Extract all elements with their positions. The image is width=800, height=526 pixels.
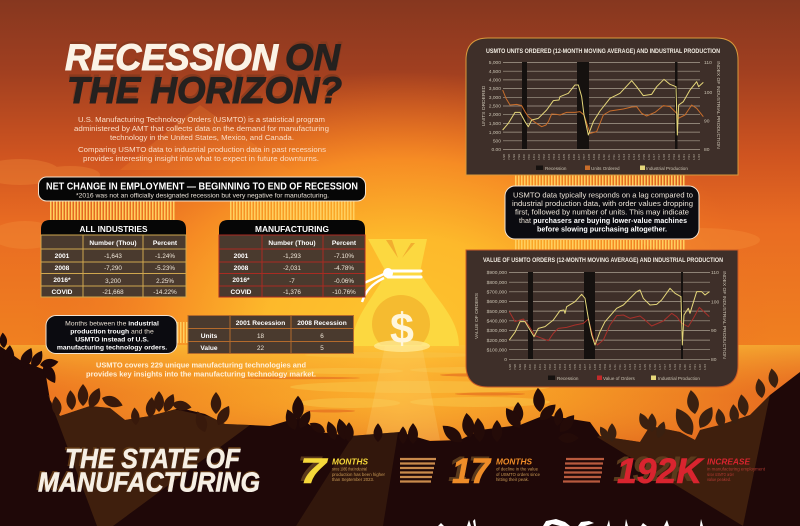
panel: manufacturing table: MANUFACTURING <box>255 225 329 234</box>
panel: units ordered chart: 1/07 <box>577 154 581 160</box>
stat: 17 months: of decline in the value <box>496 466 539 472</box>
title: RECESSION <box>65 34 279 75</box>
panel: units ordered chart: 7/11 <box>612 154 616 160</box>
panel: units ordered chart: 1/14 <box>632 154 636 160</box>
foliage silhouette <box>0 332 800 526</box>
heading: the state of manufacturing: MANUFACTURING <box>38 466 260 498</box>
panel: value of orders chart: $100,000 <box>487 348 507 354</box>
panel: units ordered chart: 90 <box>704 118 710 124</box>
panel: units ordered chart: 1/99 <box>512 154 516 160</box>
panel: lag table: 18 <box>257 333 264 340</box>
panel: value of orders chart: 1/20 <box>683 364 687 370</box>
stat: 192K increase: in manufacturing employment <box>707 466 766 472</box>
panel: units ordered chart: 5,000 <box>489 60 501 66</box>
panel: units ordered chart: INDEX OF INDUSTRIAL PRODUCTION <box>715 61 721 149</box>
panel: units ordered chart: 1/17 <box>652 154 656 160</box>
panel: value of orders chart: $500,000 <box>487 309 507 315</box>
heading: net change in employment: NET CHANGE IN EMPLOYMENT — BEGINNING TO END OF RECESSION <box>46 180 358 192</box>
panel: manufacturing table: -1,293 <box>283 253 301 260</box>
panel: manufacturing table: Number (Thou) <box>268 240 316 247</box>
panel: lag table: 22 <box>257 345 264 352</box>
panel: units ordered chart: 1/13 <box>622 154 626 160</box>
panel: lag table: 2001 Recession <box>236 320 285 327</box>
chart legend: Industrial Production <box>658 376 700 381</box>
stat: 17 months: of USMTO orders since <box>496 472 541 477</box>
panel: value of orders chart: 100 <box>711 300 719 306</box>
panel: all industries table: 2016* <box>53 277 71 284</box>
panel: value of orders chart: 0 <box>504 357 507 363</box>
panel: all industries table: -5.23% <box>155 265 175 272</box>
panel: units ordered chart: 7/02 <box>542 154 546 160</box>
panel: units ordered chart: 3,000 <box>489 95 501 101</box>
panel: value of orders chart: 1/10 <box>608 364 612 370</box>
panel: units ordered chart: 4,500 <box>489 69 501 75</box>
chart legend: Value of Orders <box>603 376 636 381</box>
title: THE HORIZON? <box>67 70 342 111</box>
chart legend <box>548 376 700 381</box>
panel: all industries table: 2.25% <box>156 278 174 285</box>
panel: manufacturing table: -4.78% <box>334 265 354 272</box>
panel: manufacturing table <box>219 220 365 297</box>
callout: months between trough and orders <box>46 316 177 354</box>
panel: lag table: 6 <box>320 333 324 340</box>
title: THE HORIZON? <box>66 67 341 108</box>
callout: months between trough and orders: Months between the industrial <box>65 320 159 328</box>
panel: value of orders chart: 1/02 <box>543 364 547 370</box>
chart title: VALUE OF USMTO ORDERS (12-MONTH MOVING AVERAGE) AND INDUSTRIAL PRODUCTION <box>483 257 723 264</box>
callout: lag explanation <box>505 186 699 239</box>
stat: 192K increase <box>613 450 766 491</box>
panel: lag table: 2008 Recession <box>297 320 347 327</box>
callout: months between trough and orders: manufacturing technology orders. <box>57 344 167 352</box>
heading: the state of manufacturing: MANUFACTURING <box>36 465 260 496</box>
panel: value of orders chart: $300,000 <box>487 328 507 334</box>
panel: all industries table: ALL INDUSTRIES <box>80 225 148 234</box>
callout: months between trough and orders: USMTO instead of U.S. <box>75 336 149 344</box>
panel: value of orders chart: 1/13 <box>628 364 632 370</box>
stat: 192K increase: 192K <box>617 452 705 491</box>
panel: units ordered chart: 7/17 <box>657 154 661 160</box>
panel: value of orders chart: 1/01 <box>538 364 542 370</box>
title: ON <box>286 34 343 75</box>
panel: units ordered chart: 1/03 <box>547 154 551 160</box>
panel: units ordered chart: 100 <box>704 90 712 96</box>
panel: units ordered chart: 7/99 <box>517 154 521 160</box>
panel: units ordered chart: 7/15 <box>642 154 646 160</box>
panel: manufacturing table: 2016* <box>232 277 250 284</box>
panel: all industries table: 2008 <box>55 265 70 272</box>
text: USMTO coverage note <box>86 360 316 378</box>
stat: 7 months: 7 <box>300 452 328 491</box>
callout: lag explanation: before slowing purchasing altogether. <box>537 226 667 234</box>
panel: all industries table: 2001 <box>55 253 70 260</box>
panel: value of orders chart: $900,000 <box>487 270 507 276</box>
panel: manufacturing table: -0.06% <box>334 278 354 285</box>
panel: units ordered chart: 2,500 <box>489 104 501 110</box>
panel: value of orders chart: INDEX OF INDUSTRIAL PRODUCTION <box>721 271 727 359</box>
panel: units ordered chart: 1/15 <box>637 154 641 160</box>
chart legend: Industrial Production <box>646 166 688 171</box>
title <box>65 34 343 111</box>
panel: value of orders chart: 7/19 <box>678 364 682 370</box>
panel: units ordered chart: 1/02 <box>537 154 541 160</box>
panel: units ordered chart: 1/00 <box>522 154 526 160</box>
panel: units ordered chart: 1/23 <box>697 154 701 160</box>
chart legend <box>536 166 688 171</box>
panel: lag table: Value <box>200 345 218 352</box>
panel: all industries table: Percent <box>153 240 178 247</box>
chart legend: Recession <box>557 376 579 381</box>
panel: value of orders chart: $400,000 <box>487 318 507 324</box>
callout: lag explanation: first, followed by number of units. This may indicate <box>515 210 689 216</box>
panel: all industries table: -21,668 <box>102 289 124 296</box>
panel: value of orders chart: 7/99 <box>523 364 527 370</box>
panel: manufacturing table: Percent <box>332 240 357 247</box>
panel: units ordered chart: 1/19 <box>667 154 671 160</box>
text: USMTO coverage note: provides key insights into the manufacturing technology market. <box>86 370 316 378</box>
stat: 7 months: since 1985 that industrial <box>332 466 367 472</box>
panel: value of orders chart: 7/02 <box>548 364 552 370</box>
panel: units ordered chart: 1/16 <box>647 154 651 160</box>
panel: value of orders chart: $200,000 <box>487 338 507 344</box>
panel: value of orders chart: 7/98 <box>513 364 517 370</box>
panel: value of orders chart: 1/04 <box>563 364 567 370</box>
panel: value of orders chart: 7/05 <box>573 364 577 370</box>
panel: all industries table: COVID <box>52 289 73 296</box>
panel: manufacturing table: 2001 <box>234 253 249 260</box>
stat: 192K increase: INCREASE <box>707 456 750 466</box>
panel: value of orders chart: 7/15 <box>648 364 652 370</box>
stat: 7 months <box>297 450 386 491</box>
panel: value of orders chart: $800,000 <box>487 280 507 286</box>
panel: units ordered chart: 0.00 <box>491 147 501 153</box>
chart title: USMTO UNITS ORDERED (12-MONTH MOVING AVERAGE) AND INDUSTRIAL PRODUCTION <box>486 48 720 55</box>
panel: units ordered chart: 1/10 <box>602 154 606 160</box>
intro text <box>74 115 329 163</box>
panel: all industries table: -1.24% <box>155 253 175 260</box>
panel: value of orders chart: 7/00 <box>533 364 537 370</box>
heading: net change in employment <box>38 177 366 201</box>
panel: manufacturing table: -2,031 <box>283 265 301 272</box>
panel: value of orders chart: 1/14 <box>638 364 642 370</box>
panel: units ordered chart: 7/07 <box>582 154 586 160</box>
panel: units ordered chart: 1/11 <box>607 154 611 160</box>
panel: units ordered chart: 7/09 <box>597 154 601 160</box>
panel: units ordered chart: 1/21 <box>682 154 686 160</box>
stat: 17 months <box>448 450 541 491</box>
stat: 17 months: 17 <box>448 450 490 489</box>
callout: months between trough and orders: production trough and the <box>70 328 154 336</box>
panel: units ordered chart: 80 <box>704 147 710 153</box>
intro text: technology in the United States, Mexico, and Canada. <box>110 133 294 142</box>
panel: value of orders chart: 1/99 <box>518 364 522 370</box>
panel: units ordered chart: 1/12 <box>617 154 621 160</box>
title: RECESSION <box>65 37 279 78</box>
heading: the state of manufacturing <box>36 441 260 498</box>
panel: value of orders chart: 1/09 <box>598 364 602 370</box>
panel: value of orders chart: 90 <box>711 328 717 334</box>
stat: 192K increase: value peaked. <box>707 477 731 482</box>
heading: the state of manufacturing: THE STATE OF <box>63 441 241 472</box>
panel: units ordered chart: 7/21 <box>687 154 691 160</box>
panel: value of orders chart: 7/11 <box>618 364 622 370</box>
panel: value of orders chart: 1/08 <box>593 364 597 370</box>
panel: units ordered chart: 1,000 <box>489 130 501 136</box>
callout: lag explanation: industrial production data, with order values dropping <box>512 201 693 208</box>
panel: value of orders chart: 1/22 <box>698 364 702 370</box>
panel: value of orders chart: 7/07 <box>588 364 592 370</box>
panel: all industries table: -7,290 <box>104 265 122 272</box>
panel: manufacturing table: COVID <box>231 289 252 296</box>
panel: units ordered chart <box>466 38 738 175</box>
panel: value of orders chart: 7/21 <box>693 364 697 370</box>
panel: units ordered chart: 1/20 <box>677 154 681 160</box>
panel: units ordered chart: 1/04 <box>557 154 561 160</box>
panel: value of orders chart: 1/07 <box>583 364 587 370</box>
panel: units ordered chart: 1/09 <box>592 154 596 160</box>
panel: units ordered chart: 3,500 <box>489 86 501 92</box>
panel: units ordered chart: 7/13 <box>627 154 631 160</box>
panel: units ordered chart: 110 <box>704 60 712 66</box>
panel: units ordered chart: 1/06 <box>572 154 576 160</box>
panel: value of orders chart: 7/13 <box>633 364 637 370</box>
panel: value of orders chart: 7/17 <box>663 364 667 370</box>
stat: 7 months: production has been higher <box>332 472 386 477</box>
panel: value of orders chart: VALUE OF ORDERS <box>474 292 480 339</box>
stat: 192K increase: 192K <box>613 450 698 489</box>
panel: units ordered chart: 1/08 <box>587 154 591 160</box>
stat: 7 months: than September 2023. <box>332 477 374 482</box>
panel: units ordered chart: 500 <box>493 138 501 144</box>
panel: units ordered chart: 7/00 <box>527 154 531 160</box>
panel: manufacturing table: 2008 <box>234 265 249 272</box>
intro text: provides interesting insight into what to expect in future downturns. <box>83 154 319 163</box>
title: ON <box>285 37 341 78</box>
panel: lag table: 5 <box>320 345 324 352</box>
stat: 17 months: MONTHS <box>496 456 532 466</box>
panel: units ordered chart: 1/01 <box>532 154 536 160</box>
icon: money bag: $ <box>390 305 414 353</box>
panel: units ordered chart: 1/22 <box>692 154 696 160</box>
panel: value of orders chart: 1/17 <box>658 364 662 370</box>
panel: all industries table: 3,200 <box>105 278 121 285</box>
decorative connector stripes <box>50 181 686 332</box>
background: sunset sky <box>0 0 800 346</box>
panel: lag table <box>188 316 354 354</box>
intro text: U.S. Manufacturing Technology Orders (USMTO) is a statistical program <box>78 115 325 124</box>
panel: value of orders chart: 7/09 <box>603 364 607 370</box>
panel: value of orders chart: 1/16 <box>653 364 657 370</box>
panel: units ordered chart: 1/05 <box>562 154 566 160</box>
panel: all industries table <box>41 220 186 297</box>
panel: units ordered chart: 7/98 <box>507 154 511 160</box>
panel: value of orders chart <box>466 250 738 387</box>
stat: 7 months: MONTHS <box>332 456 368 466</box>
panel: value of orders chart: 1/23 <box>703 364 707 370</box>
panel: value of orders chart: 1/11 <box>613 364 617 370</box>
heading: the state of manufacturing: THE STATE OF <box>65 443 241 474</box>
panel: manufacturing table: -1,376 <box>283 289 301 296</box>
panel: units ordered chart: UNITS ORDERED <box>481 85 487 126</box>
panel: value of orders chart: 1/21 <box>688 364 692 370</box>
panel: units ordered chart: 1,500 <box>489 121 501 127</box>
panel: units ordered chart: 1/98 <box>502 154 506 160</box>
panel: units ordered chart: 7/03 <box>552 154 556 160</box>
panel: units ordered chart: 2,000 <box>489 112 501 118</box>
panel: units ordered chart: 4,000 <box>489 78 501 84</box>
chart legend: Recession <box>545 166 567 171</box>
panel: value of orders chart: 110 <box>711 270 719 276</box>
icon: money bag <box>352 239 459 353</box>
panel: value of orders chart: 1/12 <box>623 364 627 370</box>
background: water <box>0 345 800 445</box>
panel: value of orders chart: $600,000 <box>487 299 507 305</box>
callout: lag explanation: USMTO data typically responds on a lag compared to <box>513 192 693 200</box>
panel: value of orders chart: $700,000 <box>487 290 507 296</box>
intro text: Comparing USMTO data to industrial production data in past recessions <box>78 145 326 154</box>
decorative stripes <box>400 459 436 482</box>
panel: all industries table: Number (Thou) <box>89 240 137 247</box>
panel: units ordered chart: 7/05 <box>567 154 571 160</box>
chart legend: Units Ordered <box>591 166 620 171</box>
panel: value of orders chart: 1/15 <box>643 364 647 370</box>
panel: units ordered chart: 1/18 <box>662 154 666 160</box>
panel: value of orders chart: 80 <box>711 357 717 363</box>
panel: value of orders chart: 7/03 <box>558 364 562 370</box>
panel: value of orders chart: 1/18 <box>668 364 672 370</box>
panel: lag table: Units <box>201 333 218 340</box>
stat: 17 months: 17 <box>452 452 491 491</box>
heading: net change in employment: *2016 was not an officially designated recession but very negative for manufacturing. <box>76 192 329 200</box>
panel: all industries table: -1,643 <box>104 253 122 260</box>
panel: value of orders chart: 1/06 <box>578 364 582 370</box>
callout: lag explanation: that purchasers are buying lower-value machines <box>519 218 687 225</box>
panel: value of orders chart: 1/03 <box>553 364 557 370</box>
panel: manufacturing table: -7.10% <box>334 253 354 260</box>
panel: value of orders chart: 1/05 <box>568 364 572 370</box>
panel: value of orders chart: 1/00 <box>528 364 532 370</box>
stat: 192K increase: since USMTO order <box>707 472 734 477</box>
panel: units ordered chart: 7/19 <box>672 154 676 160</box>
cropped white lettering at bottom edge <box>438 519 703 526</box>
panel: manufacturing table: -10.76% <box>332 289 356 296</box>
intro text: administered by AMT that collects data on the demand for manufacturing <box>74 124 329 133</box>
decorative stripes <box>563 459 604 482</box>
panel: value of orders chart: 1/98 <box>508 364 512 370</box>
stat: 7 months: 7 <box>297 450 323 489</box>
text: USMTO coverage note: USMTO covers 229 unique manufacturing technologies and <box>96 360 306 370</box>
panel: manufacturing table: -7 <box>289 278 295 285</box>
panel: value of orders chart: 1/19 <box>673 364 677 370</box>
stat: 17 months: hitting their peak. <box>496 477 529 482</box>
panel: all industries table: -14.22% <box>153 289 177 296</box>
